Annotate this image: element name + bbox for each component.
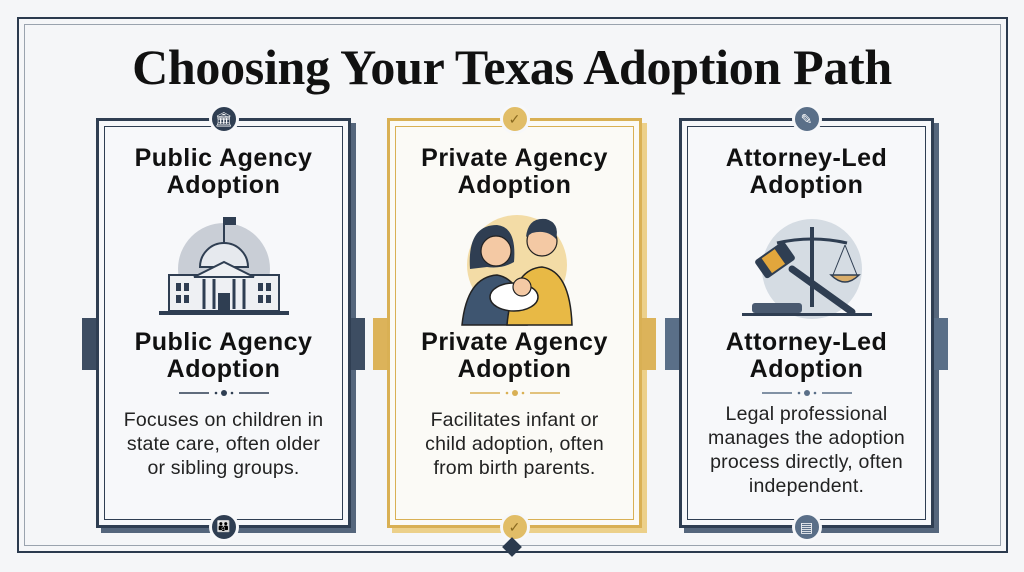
icon: family with baby — [461, 215, 573, 326]
body text: state care, often older — [127, 433, 320, 455]
body text: Facilitates infant or — [431, 409, 598, 431]
heading bottom: Private Agency — [421, 328, 608, 356]
icon: pen badge top — [792, 104, 822, 134]
heading top: Adoption — [167, 171, 280, 199]
heading bottom: Adoption — [750, 355, 863, 383]
heading bottom: Adoption — [458, 355, 571, 383]
icon: government building — [159, 217, 289, 315]
heading top — [726, 144, 887, 199]
body text — [425, 409, 604, 479]
body text: independent. — [749, 475, 864, 497]
body text: process directly, often — [710, 451, 903, 473]
divider — [762, 390, 852, 396]
icon: bank badge top: 🏛 — [215, 111, 232, 127]
icon: document badge bottom — [792, 512, 822, 542]
panel: private agency — [387, 118, 642, 528]
heading bottom: Attorney-Led — [726, 328, 887, 356]
icon: check badge bottom: ✓ — [509, 519, 520, 535]
divider — [470, 390, 560, 396]
title: Choosing Your Texas Adoption Path — [132, 39, 892, 95]
icon: check badge bottom — [500, 512, 530, 542]
icon: family badge bottom — [208, 512, 238, 542]
panel: public agency — [96, 118, 351, 528]
icon: bank badge top — [208, 104, 238, 134]
heading top — [135, 144, 312, 199]
icon: gavel and scales — [742, 219, 872, 319]
body text: Legal professional — [726, 403, 887, 425]
icon: family badge bottom: 👪 — [217, 521, 230, 533]
body text: child adoption, often — [425, 433, 604, 455]
heading bottom — [726, 328, 887, 383]
icon: document badge bottom: ▤ — [800, 519, 813, 535]
heading bottom — [135, 328, 312, 383]
body text: or sibling groups. — [147, 457, 300, 479]
heading top: Adoption — [750, 171, 863, 199]
divider — [179, 390, 269, 396]
heading bottom — [421, 328, 608, 383]
icon: pen badge top: ✎ — [801, 111, 812, 127]
panel: attorney-led — [679, 118, 934, 528]
body text: from birth parents. — [433, 457, 596, 479]
body text — [708, 403, 905, 497]
body text: Focuses on children in — [124, 409, 323, 431]
icon: check badge top: ✓ — [509, 111, 520, 127]
icon: check badge top — [500, 104, 530, 134]
heading bottom: Public Agency — [135, 328, 312, 356]
heading top: Private Agency — [421, 144, 608, 172]
heading top — [421, 144, 608, 199]
heading top: Attorney-Led — [726, 144, 887, 172]
icon: bottom diamond — [502, 537, 522, 557]
heading top: Adoption — [458, 171, 571, 199]
heading bottom: Adoption — [167, 355, 280, 383]
body text — [124, 409, 323, 479]
body text: manages the adoption — [708, 427, 905, 449]
heading top: Public Agency — [135, 144, 312, 172]
